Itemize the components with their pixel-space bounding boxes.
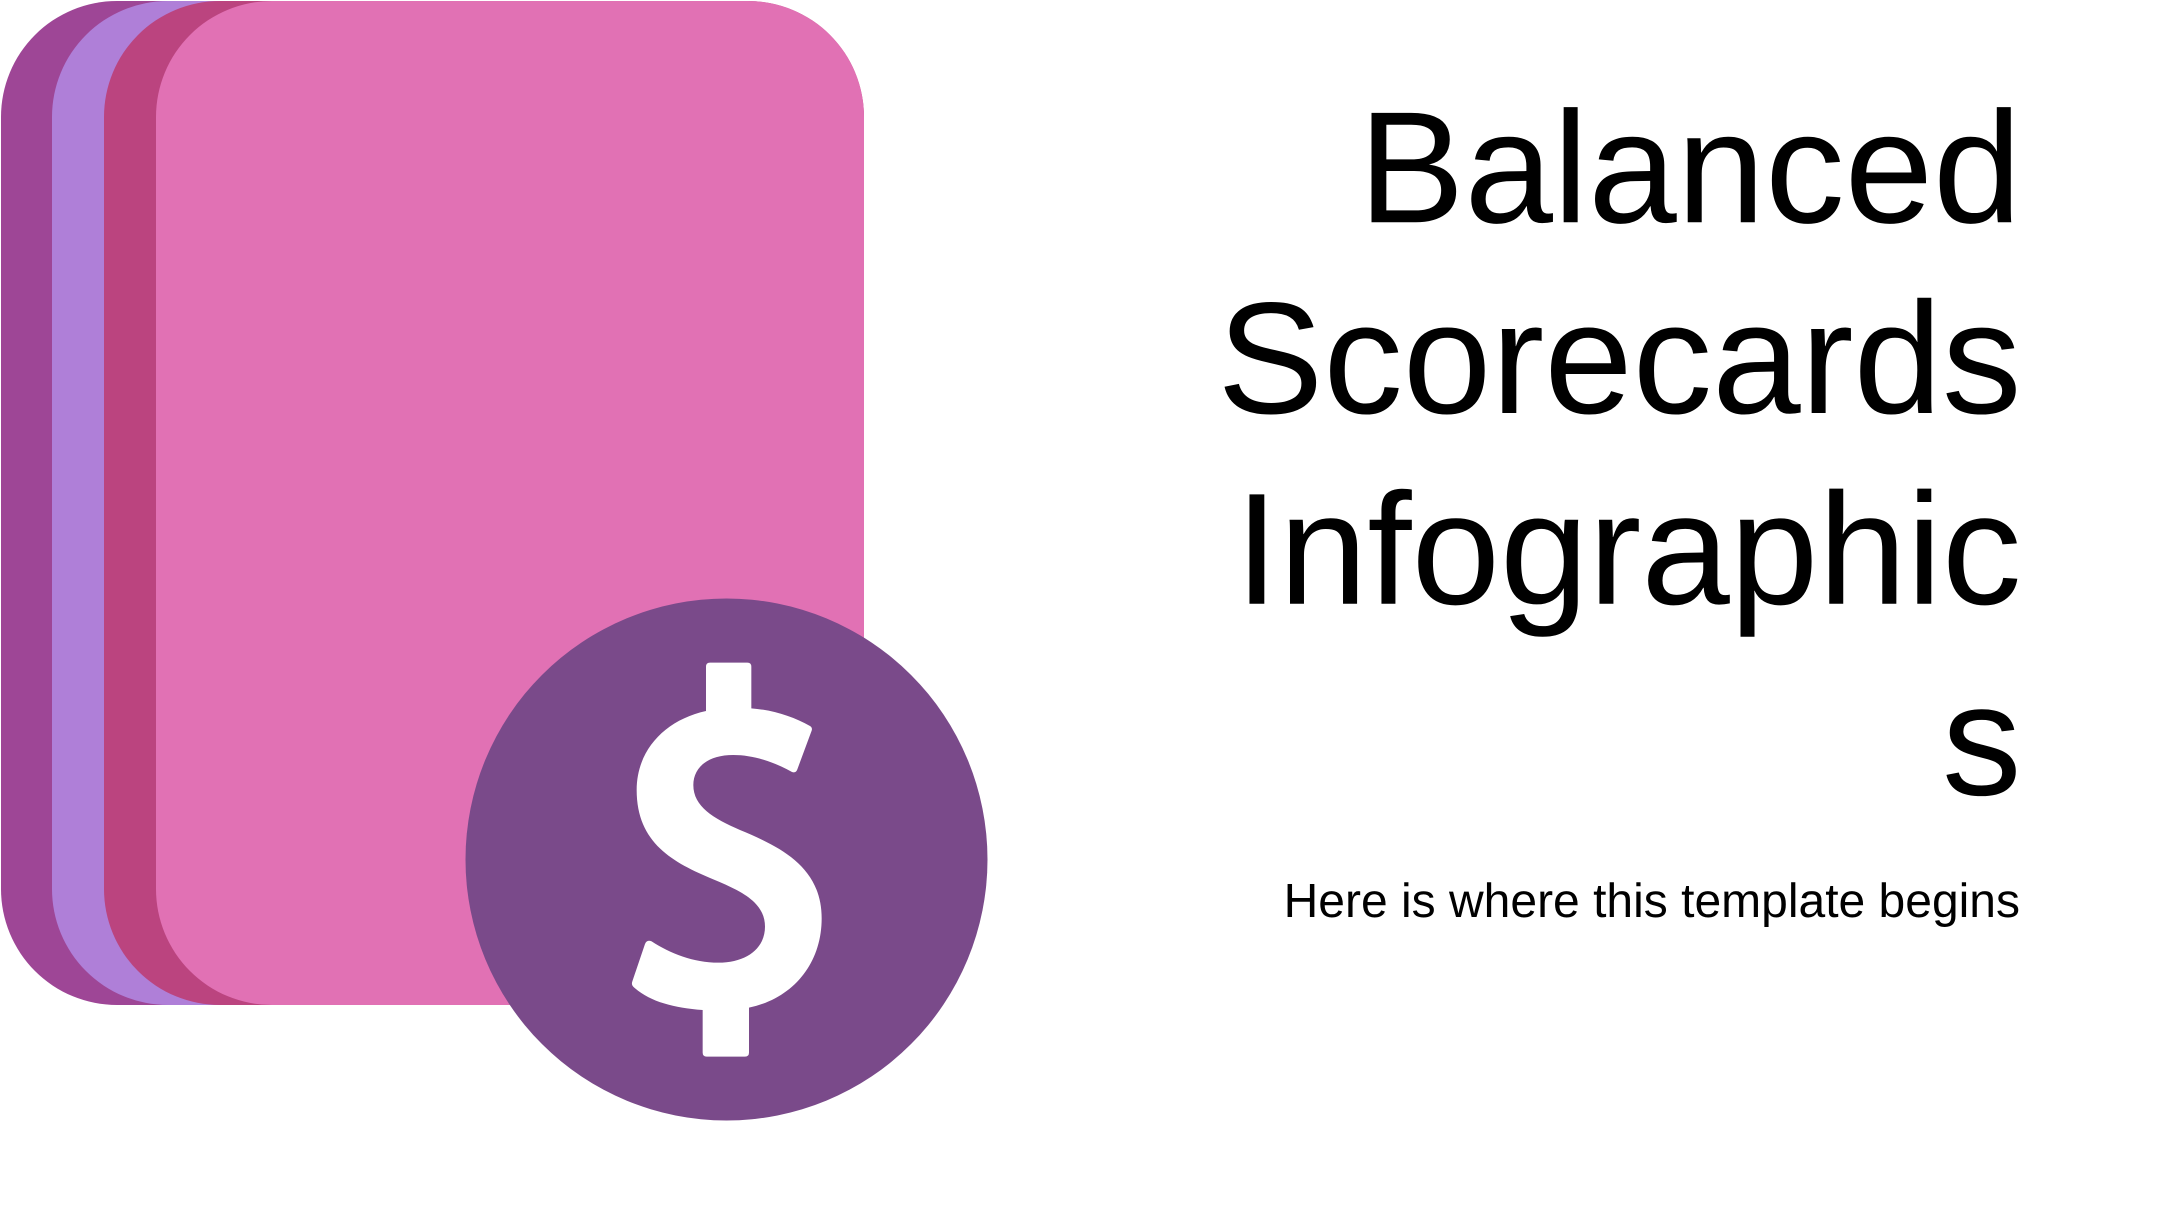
card: dark purple back card <box>1 1 709 1005</box>
title <box>1217 78 2022 829</box>
subtitle: Here is where this template begins <box>1284 875 2020 928</box>
icon: white dollar sign <box>632 663 822 1057</box>
title: Balanced <box>1358 78 2022 256</box>
title: Scorecards <box>1217 269 2022 447</box>
card: lavender card <box>52 1 812 1005</box>
coin: purple circle <box>466 598 988 1120</box>
title: s <box>1942 651 2022 829</box>
card: pink front card <box>156 1 864 1005</box>
card: rose card <box>104 1 864 1005</box>
title: Infographic <box>1235 460 2022 638</box>
